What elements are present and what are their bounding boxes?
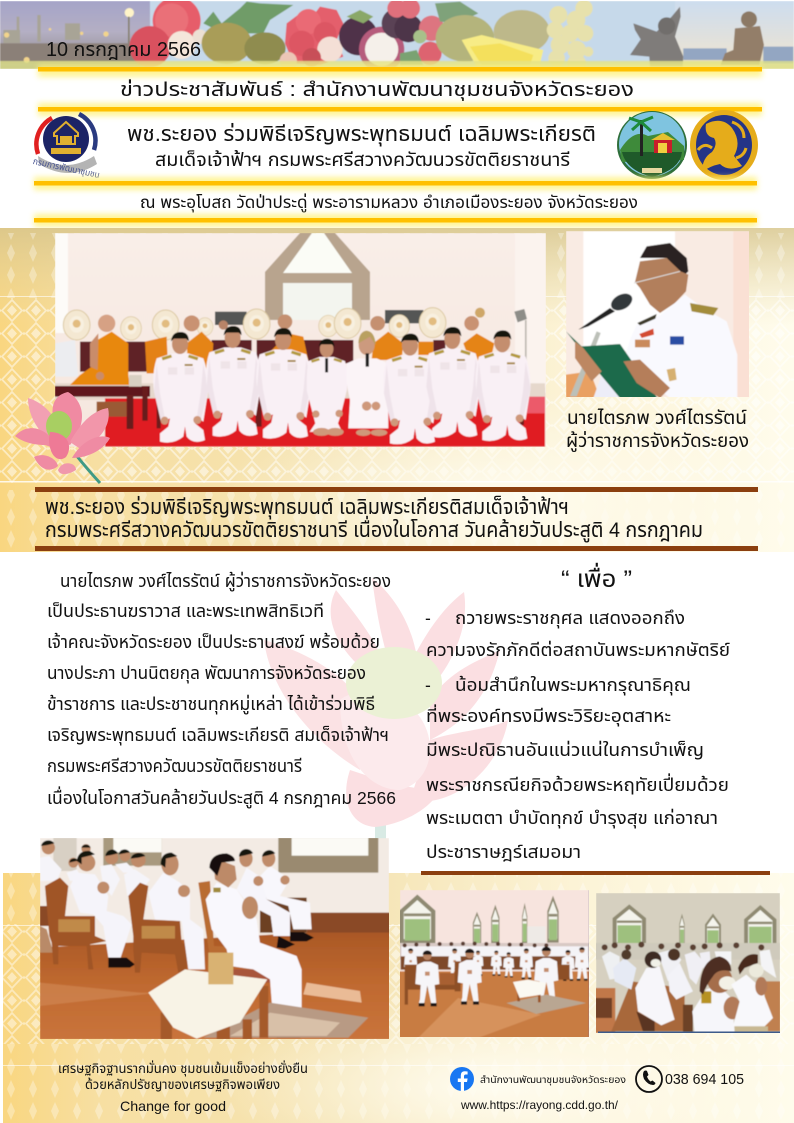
website: www.https://rayong.cdd.go.th/: [460, 1098, 619, 1112]
venue line: ณ พระอุโบสถ วัดป่าประดู่ พระอารามหลวง อำเภอเมืองระยอง จังหวัดระยอง: [140, 194, 638, 212]
facebook page name: สำนักงานพัฒนาชุมชนจังหวัดระยอง: [480, 1074, 626, 1086]
body text: purpose column: ถวายพระราชกุศล แสดงออกถึง: [455, 608, 685, 629]
body text: left column: นางประภา ปานนิตยกุล พัฒนาการจังหวัดระยอง: [47, 663, 366, 684]
phone number: 038 694 105: [665, 1072, 744, 1088]
main heading: สมเด็จเจ้าฟ้าฯ กรมพระศรีสวางควัฒนวรขัตติยราชนารี: [155, 148, 570, 171]
header office line: ข่าวประชาสัมพันธ์ : สำนักงานพัฒนาชุมชนจังหวัดระยอง: [120, 78, 634, 101]
footer motto: ด้วยหลักปรัชญาของเศรษฐกิจพอเพียง: [85, 1077, 280, 1092]
body text: left column: เจริญพระพุทธมนต์ เฉลิมพระเกียรติ สมเด็จเจ้าฟ้าฯ: [47, 725, 389, 746]
patterned gold panel: photo section: [0, 228, 794, 552]
heading band with brown rules: กรมพระศรีสวางควัฒนวรขัตติยราชนารี เนื่องในโอกาส วันคล้ายวันประสูติ 4 กรกฎาคม: [45, 515, 703, 543]
body text: left column: เนื่องในโอกาสวันคล้ายวันประสูติ 4 กรกฎาคม 2566: [47, 786, 396, 810]
footer motto: Change for good: [120, 1098, 226, 1114]
caption: governor name and title: นายไตรภพ วงศ์ไตรรัตน์: [567, 408, 747, 429]
top banner with fruits and statues: [0, 0, 794, 73]
gold rule 1: [38, 65, 762, 77]
body text: purpose column: น้อมสำนึกในพระมหากรุณาธิคุณ: [455, 675, 691, 696]
footer motto: เศรษฐกิจฐานรากมั่นคง ชุมชนเข้มแข็งอย่างยั่งยืน: [58, 1060, 308, 1077]
body text: left column: เจ้าคณะจังหวัดระยอง เป็นประธานสงฆ์ พร้อมด้วย: [47, 632, 380, 652]
body text: left column: เป็นประธานฆราวาส และพระเทพสิทธิเวที: [47, 601, 324, 621]
purpose heading: “ เพื่อ ”: [561, 562, 632, 593]
emblem: Rayong province: [617, 111, 687, 179]
photo: assembly of officials in hall: [398, 890, 591, 1038]
footer motto: [58, 1060, 308, 1114]
caption: governor name and title: ผู้ว่าราชการจังหวัดระยอง: [566, 429, 749, 453]
body text: left column: กรมพระศรีสวางควัฒนวรขัตติยราชนารี: [47, 756, 302, 776]
body text: purpose column: ความจงรักภักดีต่อสถาบันพระมหากษัตริย์: [426, 640, 730, 660]
icon: facebook: [450, 1067, 474, 1091]
pink lotus flower: [15, 392, 110, 483]
body text: purpose column: [425, 608, 730, 862]
icon: phone: [636, 1066, 662, 1092]
gold rule 4: [34, 214, 757, 227]
gold rule 2: [38, 103, 762, 116]
heading band with brown rules: [35, 487, 758, 551]
body text: purpose column: พระเมตตา บำบัดทุกข์ บำรุงสุข แก่อาณา: [426, 808, 718, 829]
body text: purpose column: มีพระปณิธานอันแน่วแน่ในการบำเพ็ญ: [426, 740, 704, 760]
body text: purpose column: -: [425, 675, 431, 695]
body text: left column: [47, 571, 396, 810]
body text: purpose column: ประชาราษฎร์เสมอมา: [426, 842, 581, 862]
gold rule 3: [34, 177, 757, 190]
patterned gold panel: footer: [0, 873, 794, 1123]
body text: left column: ข้าราชการ และประชาชนทุกหมู่เหล่า ได้เข้าร่วมพิธี: [47, 694, 375, 716]
heading band with brown rules: พช.ระยอง ร่วมพิธีเจริญพระพุทธมนต์ เฉลิมพระเกียรติสมเด็จเจ้าฟ้าฯ: [45, 494, 569, 520]
logo: community development department: [32, 114, 101, 180]
date: 10 กรกฎาคม 2566: [46, 39, 201, 61]
main heading: พช.ระยอง ร่วมพิธีเจริญพระพุทธมนต์ เฉลิมพระเกียรติ: [127, 122, 596, 147]
caption: governor name and title: [566, 408, 749, 453]
photo: officials seated in prayer: [40, 838, 390, 1039]
brown rule under purpose text: [421, 871, 770, 875]
body text: left column: นายไตรภพ วงศ์ไตรรัตน์ ผู้ว่าราชการจังหวัดระยอง: [60, 571, 391, 593]
photo: women officials in prayer: [595, 893, 780, 1033]
emblem: Ministry of Interior: [690, 110, 758, 180]
body text: purpose column: ที่พระองค์ทรงมีพระวิริยะอุตสาหะ: [426, 704, 671, 727]
faint lotus watermark: [264, 578, 508, 880]
body text: purpose column: พระราชกรณียกิจด้วยพระหฤทัยเปี่ยมด้วย: [426, 773, 729, 795]
main heading: [127, 122, 596, 171]
photo: governor at microphone: [566, 231, 750, 398]
photo: officials kneeling with monks: [55, 233, 546, 447]
body text: purpose column: -: [425, 608, 431, 628]
logo: community development department: กรมการพัฒนาชุมชน: [32, 156, 101, 180]
